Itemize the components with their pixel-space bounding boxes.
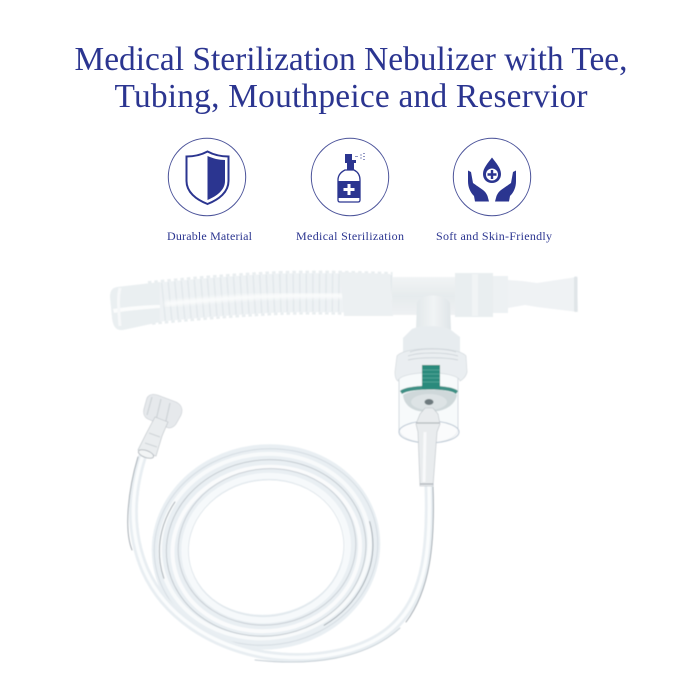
icon: soft and skin-friendly hands with drop <box>453 138 531 216</box>
product: nebulizer assembly <box>110 272 578 486</box>
label: medical sterilization: Medical Sterilization <box>296 229 404 243</box>
title: Tubing, Mouthpeice and Reservior <box>114 78 588 115</box>
green wick <box>422 365 440 389</box>
product: coiled oxygen tubing <box>128 434 433 662</box>
sleeve <box>455 273 493 317</box>
coil bundle <box>141 434 391 660</box>
left cuff <box>110 282 160 330</box>
corrugated tube <box>150 293 392 304</box>
threaded ring <box>395 348 467 381</box>
tee body <box>392 277 456 315</box>
title <box>74 41 628 115</box>
mouthpiece taper <box>508 277 578 312</box>
product: luer connector <box>137 394 182 460</box>
label: durable material: Durable Material <box>167 229 253 243</box>
title: Medical Sterilization Nebulizer with Tee, <box>74 41 628 78</box>
label: soft and skin-friendly: Soft and Skin-Friendly <box>436 229 552 243</box>
transparent cup <box>399 372 459 443</box>
sleeve end <box>493 276 508 313</box>
icon: durable material shield <box>168 138 246 216</box>
nozzle nipple <box>416 399 440 486</box>
long tube run to connector <box>128 457 433 662</box>
cap <box>403 326 460 352</box>
icon: medical sterilization spray bottle <box>311 138 389 216</box>
vertical stem <box>416 296 451 330</box>
collar at tee <box>340 272 393 316</box>
